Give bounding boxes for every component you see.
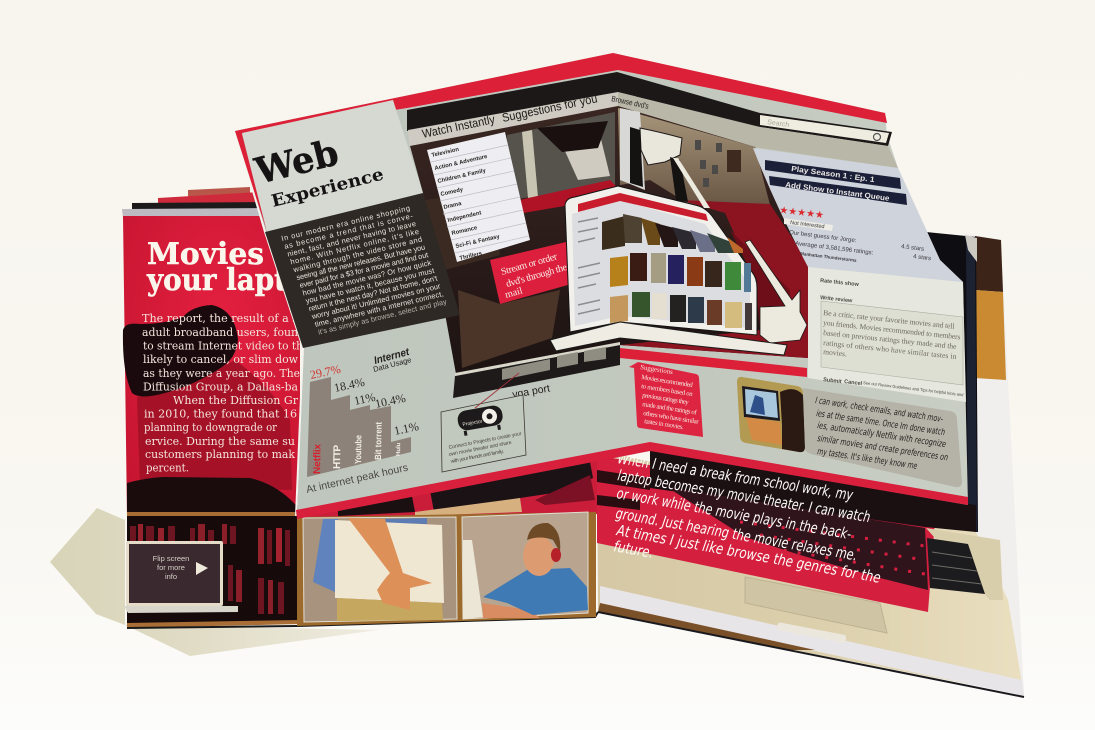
screen	[572, 200, 750, 328]
bar chart: internet data usage: 1.1%	[393, 419, 420, 438]
body text: planning to downgrade or	[144, 421, 278, 434]
button: flip screen laptop: for more	[157, 563, 185, 572]
projector box: own movie theater and share	[448, 440, 512, 458]
button: play season	[765, 160, 901, 189]
callout: suggestions: made and the ratings of	[642, 401, 698, 417]
title block	[242, 100, 423, 232]
review panel: Be a critic, rate your favorite movies and tell	[823, 308, 955, 331]
genre dropdown menu: Independent	[447, 210, 482, 224]
photo: man with headphones	[462, 512, 588, 619]
heading	[146, 237, 287, 298]
detail panel: show info	[753, 148, 963, 282]
photo: woman with laptop	[737, 377, 805, 452]
body text: percent.	[146, 462, 189, 474]
genre dropdown menu	[427, 132, 530, 262]
body text	[142, 312, 303, 474]
cast shadow	[50, 508, 378, 656]
intro text panel: nient, fast, and never having to leave	[286, 219, 417, 259]
laptop base	[550, 322, 787, 355]
show details	[784, 218, 931, 263]
keyboard	[667, 487, 1003, 600]
genre dropdown menu: Comedy	[440, 187, 464, 198]
button: flip screen laptop: info	[165, 572, 177, 581]
callout: stream or order	[490, 242, 575, 304]
projector box	[441, 373, 526, 472]
heading: your lapt	[146, 263, 287, 298]
callout: suggestions: Suggestions	[640, 364, 674, 376]
review panel: ratings of others who have similar tastes in	[823, 338, 957, 361]
body text: customers planning to mak	[145, 448, 295, 461]
body text: likely to cancel, or slim dow	[143, 353, 299, 366]
navigation labels: Watch Instantly	[421, 112, 496, 141]
intro text panel: In our modern era online shopping	[280, 203, 411, 243]
body text: adult broadband users, foun	[142, 326, 298, 339]
bottom black port strip: vga port	[511, 383, 551, 401]
heading: Movies	[147, 237, 264, 272]
netflix red bar	[578, 193, 708, 221]
photo: brick building lower left	[458, 290, 560, 368]
grey nav band	[408, 92, 650, 150]
bar chart: internet data usage: HTTP	[332, 445, 343, 469]
show details: Our best guess for Jorge:	[789, 230, 857, 244]
review panel: See our Review Guidelines and Tips for helpful hints and	[863, 380, 964, 397]
website sidebar text	[578, 218, 600, 314]
bar chart: internet data usage: Internet	[373, 346, 411, 367]
genre dropdown menu: Children & Family	[437, 168, 487, 185]
bar chart: internet data usage: At internet peak hours	[305, 462, 409, 496]
intro text panel: walking through the video store and	[292, 235, 423, 274]
back pages behind left panel	[122, 187, 265, 218]
show details: 4.5 stars	[901, 244, 924, 253]
wood frame	[297, 512, 596, 626]
dark screen bezel band	[650, 450, 976, 532]
bar chart: internet data usage: 11%	[353, 390, 377, 408]
review panel: Submit	[823, 377, 842, 385]
handwritten quote: future.	[612, 537, 655, 562]
review panel: you friends. Movies recommended to members	[823, 318, 961, 341]
photo silhouette: sofa	[127, 477, 300, 516]
review panel: Write review	[820, 295, 853, 304]
panel: folded web experience sheet	[235, 53, 968, 519]
panel: laptop photo with quote	[597, 449, 1024, 697]
intro text panel: you have to watch it, because you must	[305, 266, 435, 305]
bar chart: internet data usage: 10.4%	[374, 391, 407, 411]
handwritten quote: At times I just like browse the genres for the	[614, 521, 882, 587]
handwritten note: ies at the same time. Once Im done watch	[816, 409, 946, 438]
review panel: movies.	[823, 347, 848, 358]
red rule under screen	[620, 348, 807, 377]
show details: Manhattan Thunderstorms	[800, 251, 857, 263]
navigation labels: Suggestions for you	[501, 91, 599, 125]
intro text panel: how bad the movie was? Or how quick	[302, 258, 432, 298]
handwritten note: ies, automatically Netflix with recognize	[817, 421, 947, 450]
keyboard photo strip	[297, 456, 597, 520]
photo strip	[297, 456, 597, 626]
show details: Average of 3,581,596 ratings:	[795, 241, 874, 257]
button: add to queue: Add Show to Instant Queue	[785, 180, 890, 203]
callout: suggestions: others who have similar	[643, 410, 700, 426]
bar chart: internet data usage: Bit torrent	[373, 422, 384, 460]
title block: Web	[250, 132, 343, 193]
projector box: Connect to Projects to create your	[448, 431, 522, 451]
photo: skyscraper columns	[507, 112, 615, 200]
navigation labels	[421, 91, 650, 141]
review panel: Cancel	[844, 379, 863, 387]
bar chart: internet data usage: Netflix	[312, 443, 324, 474]
illustration arms and blobs	[630, 127, 807, 343]
bar chart: internet data usage	[305, 346, 420, 496]
page edge below the fold	[127, 612, 598, 628]
navigation labels: Browse dvd's	[611, 94, 650, 111]
handwritten quote: When I need a break from school work, my	[616, 449, 855, 504]
icon: projector: Projector	[462, 419, 483, 428]
callout: suggestions: Movies recommended	[641, 374, 694, 389]
main photo background	[410, 106, 808, 374]
intro text panel: ever paid for a $3 for a movie and find out	[299, 250, 429, 290]
handwritten quote: ground. Just hearing the movie relaxes me.	[614, 504, 859, 564]
intro text panel: time, anywhere with a internet connect,	[314, 289, 444, 329]
rating stars: ★★★★★	[779, 205, 824, 221]
black nav band	[407, 72, 892, 146]
laptop illustration with movie posters	[550, 127, 807, 355]
callout: suggestions: to members based on	[641, 383, 694, 398]
search bar: Search	[767, 119, 790, 129]
genre dropdown menu: Television	[431, 147, 460, 159]
trackpad	[745, 577, 887, 633]
intro text panel: seeing all the new releases. But have you	[295, 242, 426, 282]
red quote block	[597, 455, 935, 612]
bar chart: internet data usage: Hulu	[396, 442, 402, 456]
button: add to queue	[769, 176, 907, 205]
intro text panel	[265, 193, 460, 348]
intro text panel: home. With Netflix online, it's like	[289, 227, 420, 266]
review panel: Rate this show	[820, 278, 860, 288]
handwritten quote	[612, 449, 882, 587]
handwritten note: my tastes. It's like they know me	[817, 447, 918, 472]
bar chart: internet data usage: 29.7%	[309, 362, 342, 382]
button: flip screen laptop: Flip screen	[153, 554, 189, 563]
intro text panel: return it the next day? Not at home, don't	[308, 274, 438, 313]
callout: suggestions	[629, 362, 703, 437]
callout: stream or order: mail	[504, 285, 524, 301]
review panel: based on previous ratings they made and the	[823, 328, 958, 351]
base outline	[598, 612, 1024, 697]
callout: suggestions: previous ratings they	[642, 392, 690, 406]
photo: laptop under arm	[303, 517, 457, 622]
bar chart: internet data usage: Youtube	[353, 435, 364, 464]
body text: in 2010, they found that 16	[144, 408, 297, 420]
right back page with paper edge	[926, 232, 1024, 695]
genre dropdown menu: Sci-Fi & Fantasy	[455, 234, 501, 250]
button: play season: Play Season 1 : Ep. 1	[791, 164, 876, 184]
handwritten note: similar movies and create preferences on	[817, 434, 949, 464]
callout: suggestions: tastes in movies.	[644, 418, 685, 431]
bar chart: internet data usage: 18.4%	[333, 375, 366, 395]
body text: Diffusion Group, a Dallas-ba	[143, 380, 298, 394]
photo silhouette: viewer's head	[123, 305, 238, 396]
body text: The report, the result of a s	[142, 312, 298, 325]
bookshelf photo strip	[124, 512, 300, 628]
review panel	[808, 267, 966, 402]
body text: to stream Internet video to th	[143, 340, 303, 352]
bottom black port strip	[453, 342, 620, 401]
callout: stream or order: dvd's through the	[505, 262, 569, 290]
sheet base	[235, 53, 968, 518]
bar chart: internet data usage: Data Usage	[372, 355, 412, 374]
handwritten quote: laptop becomes my movie theater. I can watch	[616, 466, 872, 526]
genre dropdown menu: Romance	[451, 225, 479, 237]
genre dropdown menu: Thrillers	[459, 251, 483, 262]
laptop base edge	[600, 586, 1024, 696]
handwritten note	[803, 388, 962, 487]
search bar	[760, 115, 889, 143]
body text: When the Diffusion Gr	[173, 394, 299, 407]
handwritten quote: or work while the movie plays in the back-	[615, 484, 853, 543]
body text: ervice. During the same su	[145, 435, 295, 448]
laptop screen shell	[565, 186, 757, 335]
callout: stream or order: Stream or order	[500, 251, 559, 278]
intro text panel: as become a trend that is conve-	[283, 211, 414, 251]
top red band	[235, 53, 887, 232]
button: flip screen laptop	[124, 541, 238, 613]
title block: Experience	[269, 165, 386, 212]
movie poster grid	[602, 214, 752, 330]
panel: movies on your laptop	[123, 216, 303, 516]
bottom red rule	[296, 442, 968, 519]
show details: Not Interested	[790, 220, 825, 230]
intro text panel: worry about it! Unlimited movies on your	[310, 281, 442, 321]
photo: right buildings	[618, 108, 770, 205]
photo: red curtain	[620, 200, 808, 358]
handwritten note: I can work, check emails, and watch mov-	[815, 396, 944, 425]
projector box: with your friends and family.	[450, 449, 504, 465]
show details: 4 stars	[913, 254, 931, 262]
intro text panel: it's as simply as browse, select and play	[317, 297, 448, 337]
photo silhouette: viewer's back	[137, 360, 292, 490]
body text: as they were a year ago. The	[143, 367, 300, 380]
genre dropdown menu: Action & Adventure	[434, 154, 489, 172]
genre dropdown menu: Drama	[443, 201, 463, 211]
sheet white cut edge	[236, 133, 303, 516]
